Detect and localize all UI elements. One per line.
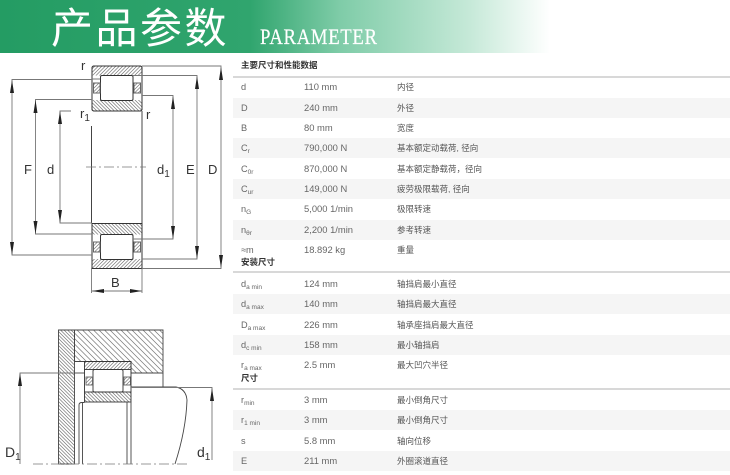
dimension labels: 1 — [84, 113, 90, 124]
bottom bearing section — [92, 224, 142, 268]
row Cr — [233, 138, 730, 158]
row s — [241, 435, 431, 446]
dimension labels: D — [208, 162, 217, 177]
mounting arrows — [18, 373, 214, 401]
row n0r: 2,200 1/min — [304, 224, 353, 235]
row dc min: dc min — [241, 340, 262, 352]
mounted bearing — [84, 362, 131, 402]
row r1 min: r1 min — [241, 415, 260, 427]
row da max: 轴挡肩最大直径 — [397, 299, 457, 309]
dimension labels: r — [146, 107, 151, 122]
dimension labels: E — [186, 162, 195, 177]
row D: 240 mm — [304, 102, 338, 113]
row da min: 124 mm — [304, 278, 338, 289]
banner title english: PARAMETER — [260, 24, 378, 49]
dimension labels: d — [47, 162, 54, 177]
row da min — [241, 278, 457, 291]
dimension labels: r — [81, 58, 86, 73]
row r min — [241, 394, 448, 407]
row Cur: 149,000 N — [304, 183, 347, 194]
row da max: 140 mm — [304, 298, 338, 309]
row Cur — [233, 179, 730, 199]
row dc min — [233, 335, 730, 355]
row d: 110 mm — [304, 81, 337, 92]
mounting dimension lines — [20, 373, 212, 464]
row da min: da min — [241, 279, 262, 291]
row B: B — [241, 123, 247, 133]
row C0r — [241, 163, 482, 176]
dimension arrows — [10, 67, 223, 293]
row Cr: 790,000 N — [304, 142, 347, 153]
dimension lines — [12, 66, 221, 293]
mounting labels: 1 — [15, 452, 21, 463]
row ra max: 最大凹穴半径 — [397, 360, 448, 370]
dimension labels: B — [111, 275, 120, 290]
row s: 5.8 mm — [304, 435, 335, 446]
row C0r: 基本额定静载荷，径向 — [397, 164, 482, 174]
row da max: da max — [241, 299, 264, 311]
row ra max: 2.5 mm — [304, 359, 335, 370]
row r min: 最小倒角尺寸 — [397, 395, 448, 405]
section heading: main dimensions: 主要尺寸和性能数据 — [241, 60, 318, 70]
row nG: 5,000 1/min — [304, 203, 353, 214]
row dc min: 158 mm — [304, 339, 338, 350]
row D: D — [241, 103, 248, 113]
row r1 min — [233, 410, 730, 430]
row d: 内径 — [397, 82, 414, 92]
row E: 211 mm — [304, 455, 337, 466]
row B — [241, 122, 414, 133]
row n0r — [233, 220, 730, 240]
row s: 轴向位移 — [397, 436, 431, 446]
row m: ≈m — [241, 245, 254, 255]
row nG — [241, 203, 431, 216]
row nG: 极限转速 — [397, 204, 431, 214]
row n0r: nθr — [241, 225, 252, 237]
row ra max: ra max — [241, 360, 262, 372]
row r min: 3 mm — [304, 394, 327, 405]
bearing drawings — [5, 58, 223, 464]
row s: s — [241, 436, 246, 446]
row Cur: 疲劳极限载荷, 径向 — [397, 184, 470, 194]
row Da max: 轴承座挡肩最大直径 — [397, 320, 474, 330]
shaft outline — [33, 373, 190, 464]
mounting drawing with dimensions — [5, 330, 214, 464]
row E — [233, 451, 730, 471]
row m — [241, 244, 414, 255]
row Da max — [241, 319, 474, 332]
housing — [58, 330, 163, 464]
mounting labels: 1 — [205, 452, 211, 463]
row d — [241, 81, 414, 92]
row D: 外径 — [397, 103, 414, 113]
row E: E — [241, 456, 247, 466]
row da min: 轴挡肩最小直径 — [397, 279, 457, 289]
dimension labels: F — [24, 162, 32, 177]
section heading: dimensions: 尺寸 — [241, 373, 258, 383]
row D — [233, 98, 730, 118]
row d: d — [241, 82, 246, 92]
shaft lines and centre line — [86, 111, 146, 223]
row r min: rmin — [241, 395, 255, 407]
row C0r: 870,000 N — [304, 163, 347, 174]
row B: 80 mm — [304, 122, 333, 133]
dimension labels: d — [157, 162, 164, 177]
row m: 重量 — [397, 245, 414, 255]
row Cr: Cr — [241, 143, 250, 155]
row n0r: 参考转速 — [397, 225, 431, 235]
row Da max: 226 mm — [304, 319, 338, 330]
dimension labels: 1 — [164, 169, 170, 180]
row B: 宽度 — [397, 123, 414, 133]
row Cr: 基本额定动载荷, 径向 — [397, 143, 478, 153]
mounting labels: d — [197, 444, 205, 460]
row Cur: Cur — [241, 184, 253, 196]
dimension labels — [24, 58, 217, 290]
row E: 外圈滚道直径 — [397, 456, 448, 466]
top bearing section — [92, 66, 142, 111]
row dc min: 最小轴挡肩 — [397, 340, 440, 350]
section heading: mounting dimensions: 安装尺寸 — [241, 257, 275, 267]
row ra max — [241, 359, 448, 372]
row Da max: Da max — [241, 320, 265, 332]
cross-section drawing with dimensions — [10, 58, 223, 293]
header banner — [0, 0, 730, 52]
mounting labels: D — [5, 444, 15, 460]
row nG: nG — [241, 204, 251, 216]
row r1 min: 3 mm — [304, 414, 327, 425]
row m: 18.892 kg — [304, 244, 345, 255]
row r1 min: 最小倒角尺寸 — [397, 415, 448, 425]
parameter table — [233, 60, 730, 471]
mounting labels — [5, 444, 211, 463]
row da max — [233, 294, 730, 314]
row C0r: C0r — [241, 164, 253, 176]
dimension labels: r — [80, 106, 84, 121]
